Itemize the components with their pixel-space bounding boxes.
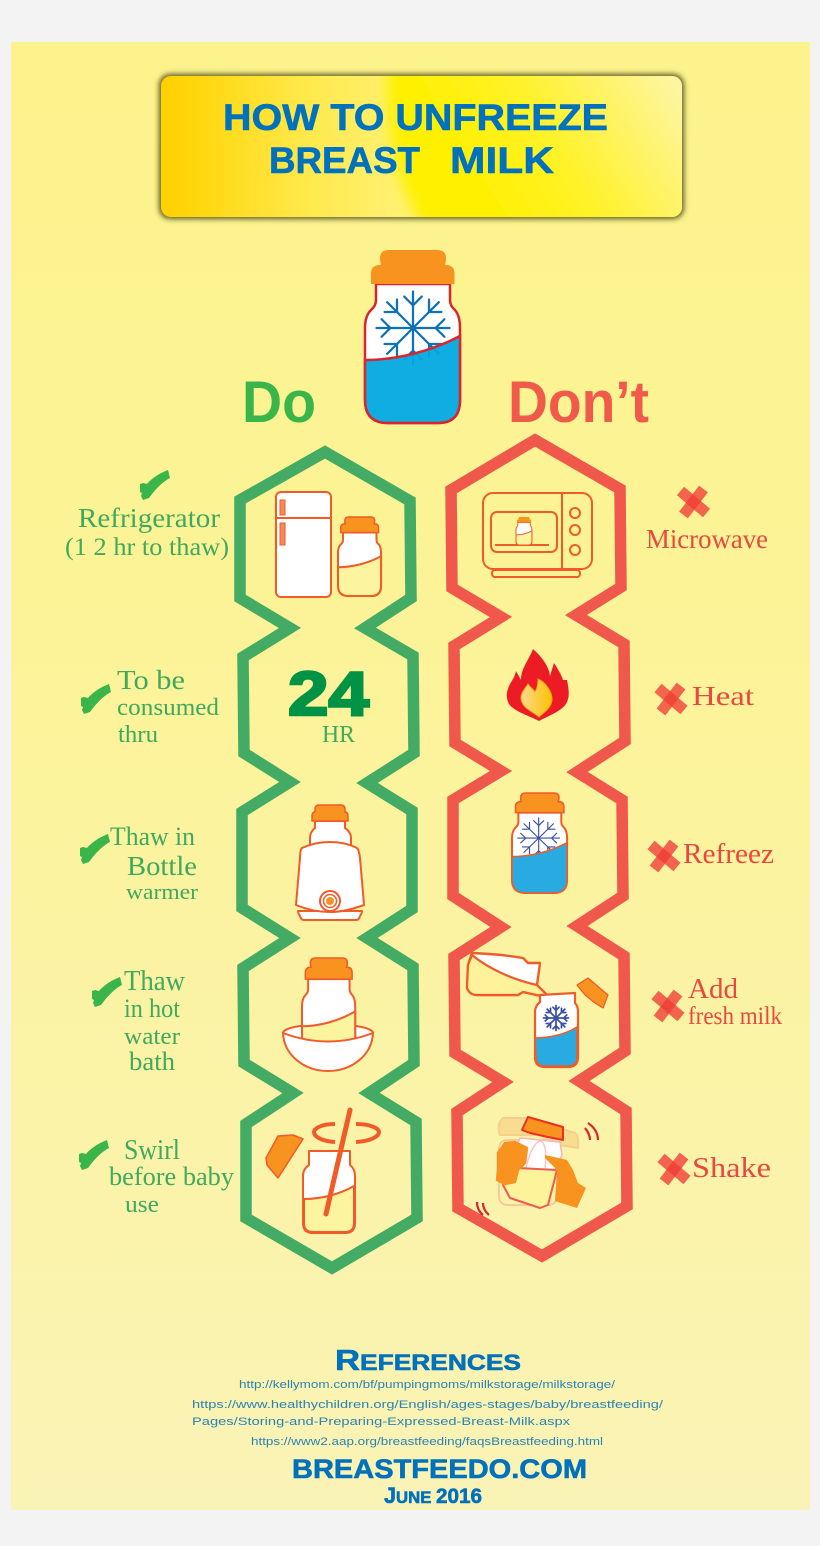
24 hr label: 24 bbox=[288, 660, 370, 729]
label: thaw in hot water bath: bath bbox=[129, 1047, 175, 1076]
label: thaw in bottle warmer bbox=[110, 822, 199, 904]
label: thaw in bottle warmer: warmer bbox=[126, 879, 199, 904]
icon: bottle in hot water bath bbox=[283, 958, 373, 1071]
title line 2: MILK bbox=[450, 140, 554, 181]
label: swirl before baby use: before baby bbox=[109, 1162, 234, 1191]
panel: do hexagon column bbox=[240, 452, 417, 1268]
label: to be consumed thru: consumed bbox=[117, 695, 219, 721]
label: to be consumed thru bbox=[117, 665, 219, 748]
label: refreez: Refreez bbox=[683, 839, 774, 870]
x mark: heat bbox=[658, 686, 684, 712]
heading: Don't: Don’t bbox=[508, 370, 649, 435]
label: swirl before baby use: use bbox=[125, 1192, 159, 1218]
heading: Do: Do bbox=[242, 370, 316, 435]
title line 2 bbox=[269, 140, 554, 181]
icon: shaking bottle bbox=[477, 1117, 598, 1215]
title line 1: HOW TO UNFREEZE bbox=[223, 97, 608, 138]
label: microwave: Microwave bbox=[646, 524, 768, 554]
label: thaw in bottle warmer: Thaw in bbox=[110, 822, 195, 851]
label: add fresh milk: Add bbox=[688, 974, 738, 1005]
label: add fresh milk: fresh milk bbox=[688, 1003, 782, 1030]
label: thaw in bottle warmer: Bottle bbox=[127, 851, 197, 881]
label: to be consumed thru: To be bbox=[117, 665, 185, 695]
icon: flame bbox=[507, 649, 569, 721]
24 hr label: HR bbox=[322, 722, 355, 748]
label: heat: Heat bbox=[692, 681, 755, 711]
x mark: shake bbox=[661, 1156, 687, 1182]
check mark: swirl bbox=[79, 1140, 109, 1170]
label: thaw in hot water bath: water bbox=[124, 1024, 180, 1050]
label: thaw in hot water bath: Thaw bbox=[124, 966, 186, 997]
label: refrigerator: (1 2 hr to thaw) bbox=[65, 534, 229, 561]
reference links: http://kellymom.com/bf/pumpingmoms/milkstorage/milkstorage/ bbox=[239, 1379, 616, 1391]
label: swirl before baby use: Swirl bbox=[124, 1135, 180, 1166]
title line 2: BREAST bbox=[269, 140, 420, 181]
date: JUNE 2016 bbox=[384, 1483, 482, 1508]
check mark: consumed bbox=[81, 684, 111, 714]
icon: frozen milk bottle bbox=[365, 250, 460, 423]
24 hr label bbox=[288, 660, 370, 748]
label: to be consumed thru: thru bbox=[118, 722, 158, 748]
label: refrigerator: Refrigerator bbox=[78, 503, 220, 533]
label: thaw in hot water bath bbox=[124, 966, 186, 1076]
x mark: microwave bbox=[680, 489, 706, 515]
check mark: refrigerator bbox=[140, 470, 170, 500]
icon: refrigerator and bottle bbox=[276, 492, 381, 597]
icon: bottle warmer bbox=[296, 805, 364, 920]
icon: adding fresh milk bbox=[467, 953, 608, 1067]
icon: refreeze bottle bbox=[512, 793, 567, 893]
label: refrigerator bbox=[65, 503, 229, 561]
label: shake: Shake bbox=[692, 1153, 771, 1184]
x mark: refreeze bbox=[651, 843, 677, 869]
check mark: hot water bbox=[92, 977, 122, 1007]
title banner bbox=[154, 70, 688, 224]
reference links: https://www.healthychildren.org/English/ages-stages/baby/breastfeeding/ bbox=[192, 1399, 664, 1411]
panel: dont hexagon column bbox=[451, 440, 627, 1256]
label: swirl before baby use bbox=[109, 1135, 234, 1218]
website: BREASTFEEDO.COM bbox=[292, 1454, 587, 1484]
reference links: Pages/Storing-and-Preparing-Expressed-Breast-Milk.aspx bbox=[192, 1416, 571, 1428]
icon: microwave bbox=[483, 493, 592, 577]
references heading: REFERENCES bbox=[335, 1345, 521, 1377]
label: thaw in hot water bath: in hot bbox=[124, 994, 181, 1023]
x mark: add fresh milk bbox=[655, 993, 681, 1019]
reference links: https://www2.aap.org/breastfeeding/faqsBreastfeeding.html bbox=[251, 1436, 603, 1448]
label: add fresh milk bbox=[688, 974, 782, 1030]
icon: swirl bottle with stick bbox=[266, 1110, 379, 1233]
reference links bbox=[192, 1379, 664, 1448]
check mark: bottle warmer bbox=[80, 834, 110, 864]
